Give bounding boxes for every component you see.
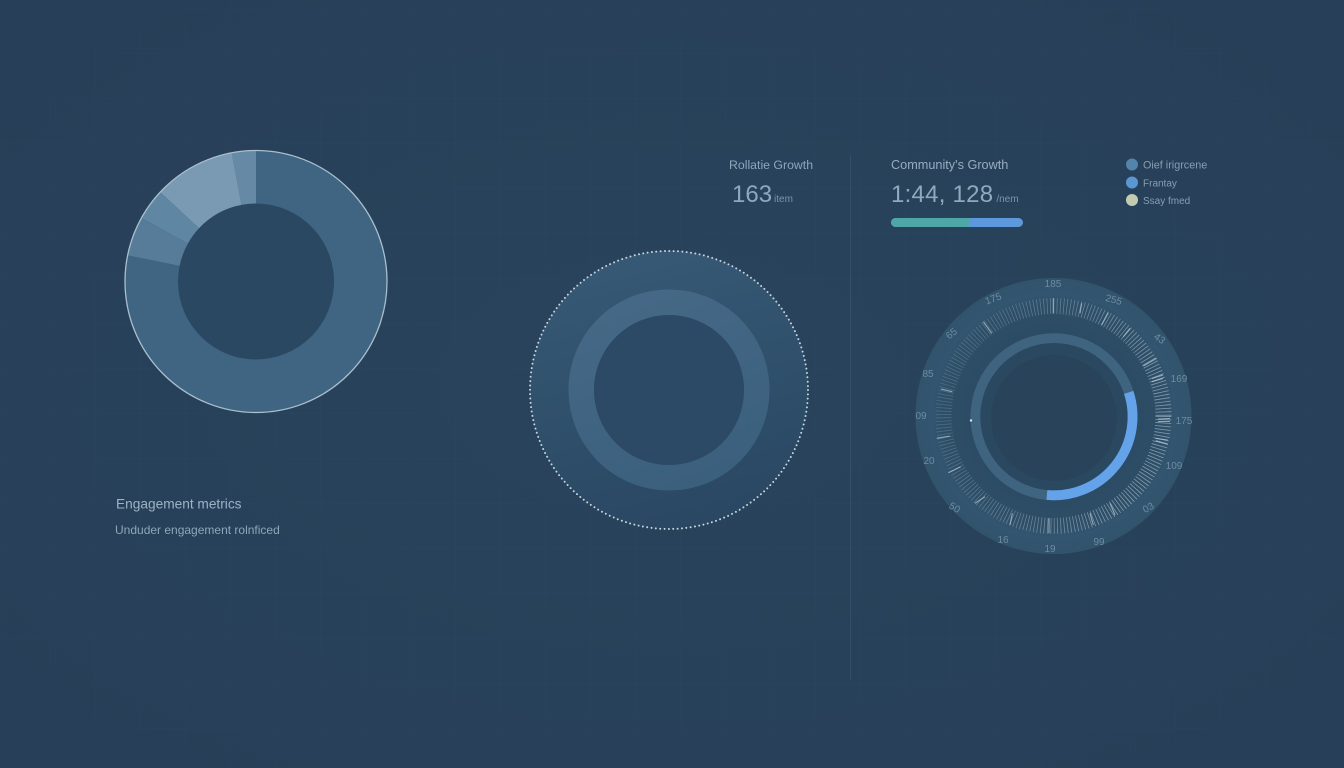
dial tick band [944,306,1164,526]
dial major ticks [937,298,1170,533]
center gauge dotted border [530,251,808,529]
subheading: engagement note: Unduder engagement rolnficed [115,523,280,537]
legend [1126,158,1207,207]
stat value: 1:44, 128 /nem [891,181,1019,208]
donut main segment [125,150,387,413]
dial outer disc [916,278,1192,554]
center gauge ring [581,302,757,478]
progress bar teal fill [891,218,969,227]
dial scale labels: 43 [1151,332,1167,347]
dial scale labels: 20 [923,456,935,467]
dial scale labels: 175 [1176,416,1193,427]
dial center disc [980,343,1128,491]
dial track ring [975,338,1133,495]
donut segment: muted [128,218,188,266]
legend item 2: Frantay [1143,178,1177,190]
donut segment: top narrow [232,150,256,205]
dial scale labels: 85 [922,369,934,380]
dial scale labels: 19 [1044,544,1056,555]
donut centre [177,202,335,360]
dial scale labels: 50 [947,501,962,516]
stat label: Rollatie Growth [729,158,813,172]
dial scale labels: 99 [1093,537,1105,548]
dial scale labels: 65 [944,326,960,342]
center gauge outer disc [530,251,808,529]
divider [850,155,852,680]
text: engagement caption [115,496,280,537]
donut segment: medium [141,192,199,244]
dial inner disc [991,355,1117,481]
legend item 1: Oief irigrcene [1143,160,1207,172]
center ring gauge [530,251,808,529]
radial dial gauge [915,278,1193,555]
dial scale labels [915,279,1193,555]
donut segment: lightest [160,153,242,228]
donut chart: engagement [125,150,387,413]
stat value: 163item [732,181,793,208]
dial scale labels: 109 [1166,461,1183,472]
dial blue progress arc [1047,392,1133,495]
dial scale labels: 175 [984,291,1004,307]
dial scale labels: 185 [1045,279,1062,290]
donut outline [125,150,387,412]
dial scale labels: 255 [1104,293,1124,308]
progress bar blue track [891,218,1023,227]
dial scale labels: 09 [915,411,927,422]
heading: engagement metrics: Engagement metrics [116,496,242,512]
center gauge inner disc [594,315,744,465]
dial scale labels: 169 [1171,374,1188,385]
legend item 3: Ssay fmed [1143,196,1190,207]
stat: relative growth [729,158,813,208]
progress bar [891,218,1023,227]
stat: community growth [891,158,1023,227]
dial start marker [970,419,972,422]
dial scale labels: 03 [1141,501,1157,516]
stat label: Community's Growth [891,158,1008,172]
dial scale labels: 16 [997,535,1009,546]
